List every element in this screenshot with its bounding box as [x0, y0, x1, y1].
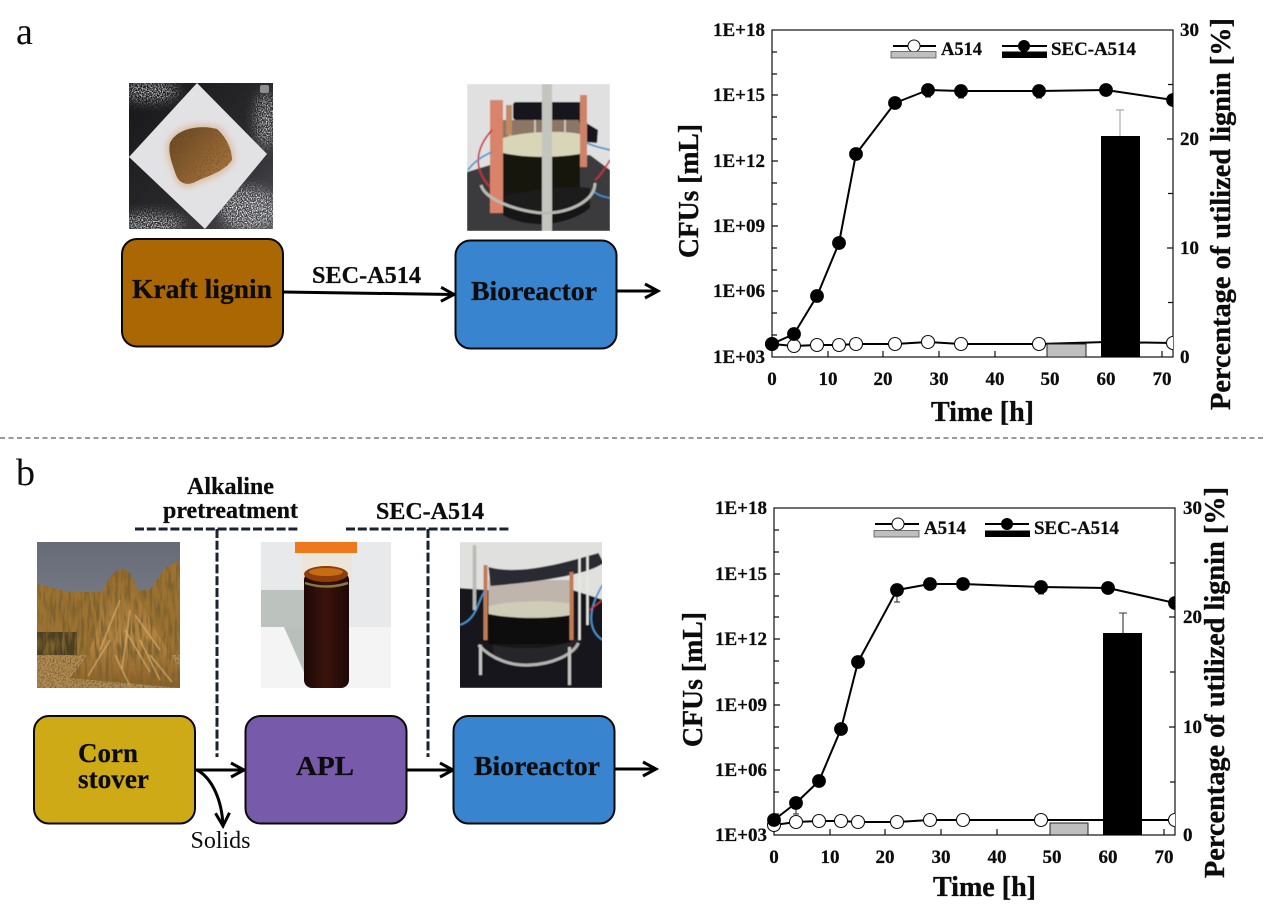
legend: A514: [924, 518, 966, 539]
dashed connector: alkaline pretreatment: [135, 529, 298, 757]
right axis tick labels: [1183, 498, 1202, 846]
chart b: CFUs and lignin utilization: [678, 487, 1231, 903]
box: Corn stover: [34, 716, 195, 824]
panel label b: b: [16, 452, 35, 494]
bar: A514 utilized lignin: [1050, 823, 1088, 835]
right axis title: Percentage of utilized lignin [%]: [1200, 487, 1231, 878]
series: SEC-A514 line and markers: [767, 577, 1182, 827]
x axis tick labels: 10: [820, 847, 840, 868]
x axis title: Time [h]: [933, 872, 1036, 903]
x axis tick labels: 0: [767, 369, 777, 390]
arrow: corn stover to APL: [195, 768, 244, 772]
label: Alkaline pretreatment: [163, 474, 298, 524]
left axis title: CFUs [mL]: [678, 612, 709, 747]
series: A514 markers: [768, 814, 1182, 832]
box: Bioreactor b: [454, 716, 614, 824]
legend: [874, 518, 1119, 539]
label: SEC-A514 strain b: SEC-A514: [376, 499, 484, 525]
box: Kraft lignin: [122, 239, 283, 346]
error bar: SEC-A514: [1119, 613, 1127, 633]
y axis tick labels: 1E+12: [713, 151, 765, 172]
y axis tick labels: [715, 498, 767, 846]
panel divider: [0, 437, 1265, 439]
legend: SEC-A514: [1051, 39, 1136, 60]
dashed connector: SEC-A514: [346, 529, 510, 757]
photo: kraft lignin powder on paper: [129, 83, 273, 229]
legend: [891, 39, 1136, 60]
right axis tick labels: 30: [1183, 498, 1202, 519]
photo: bioreactor a: [467, 84, 610, 231]
x axis tick labels: 50: [1040, 369, 1060, 390]
right axis tick labels: 20: [1183, 607, 1202, 628]
legend: A514: [941, 39, 982, 60]
box: Corn stover: Corn: [78, 737, 138, 768]
y axis tick labels: 1E+06: [715, 760, 767, 781]
y axis tick labels: 1E+03: [713, 347, 765, 368]
x axis tick labels: 10: [818, 369, 838, 390]
series: A514 line: [774, 820, 1175, 825]
y axis tick labels: 1E+18: [713, 20, 765, 41]
chart a: CFUs and lignin utilization: [674, 18, 1237, 428]
y axis tick labels: 1E+15: [715, 564, 767, 585]
photo: corn stover: [37, 542, 180, 688]
x axis tick labels: 70: [1154, 847, 1174, 868]
x axis tick labels: 0: [769, 847, 779, 868]
bar: A514 utilized lignin: [1047, 344, 1086, 357]
series: SEC-A514 line and markers: [765, 83, 1180, 351]
photo: bioreactor b: [458, 542, 604, 688]
x axis tick labels: [767, 369, 1172, 390]
x axis tick labels: 20: [874, 369, 892, 390]
x axis tick labels: 70: [1152, 369, 1172, 390]
series: A514 markers: [766, 336, 1180, 352]
label: Solids: Solids: [190, 828, 250, 854]
x axis tick labels: 40: [988, 847, 1006, 868]
x axis tick labels: 60: [1098, 847, 1118, 868]
arrow: Kraft lignin to bioreactor: [283, 292, 454, 294]
x axis tick labels: 60: [1096, 369, 1116, 390]
panel label a: a: [16, 11, 33, 53]
y axis tick labels: 1E+09: [715, 695, 767, 716]
right axis tick labels: 10: [1180, 238, 1199, 259]
label: SEC-A514 strain a: SEC-A514: [312, 263, 421, 289]
x axis title: Time [h]: [931, 397, 1034, 428]
arrow: APL to bioreactor: [407, 768, 453, 772]
right axis tick labels: 0: [1180, 347, 1190, 368]
x axis tick labels: 30: [930, 369, 948, 390]
box: Bioreactor a: [456, 240, 616, 348]
bar: SEC-A514 utilized lignin: [1103, 633, 1142, 835]
error bar: SEC-A514: [1116, 110, 1124, 136]
legend: SEC-A514: [1034, 518, 1119, 539]
right axis tick labels: 20: [1180, 129, 1199, 150]
y axis tick labels: [713, 20, 765, 368]
right axis title: Percentage of utilized lignin [%]: [1206, 18, 1237, 410]
right axis tick labels: [1180, 20, 1199, 368]
box: Bioreactor b: Bioreactor: [474, 750, 600, 781]
box: APL: APL: [296, 750, 354, 781]
box: Corn stover: stover: [78, 763, 149, 794]
y axis tick labels: 1E+12: [715, 629, 767, 650]
box: APL: [246, 716, 406, 824]
label: Alkaline pretreatment: Alkaline: [187, 474, 274, 500]
series: A514 line: [772, 342, 1173, 346]
right axis tick labels: 30: [1180, 20, 1199, 41]
box: Bioreactor a: Bioreactor: [471, 275, 597, 306]
label: Alkaline pretreatment: pretreatment: [163, 498, 298, 524]
photo: APL tube: [261, 542, 391, 688]
y axis tick labels: 1E+03: [715, 825, 767, 846]
y axis tick labels: 1E+09: [713, 216, 765, 237]
x axis tick labels: 50: [1042, 847, 1062, 868]
y axis tick labels: 1E+15: [713, 85, 765, 106]
x axis tick labels: 30: [932, 847, 950, 868]
bar: SEC-A514 utilized lignin: [1101, 136, 1140, 357]
right axis tick labels: 0: [1183, 825, 1192, 846]
left axis title: CFUs [mL]: [674, 124, 705, 258]
arrow: bioreactor b to chart: [615, 768, 656, 770]
box: Kraft lignin: Kraft lignin: [132, 273, 272, 304]
x axis tick labels: 20: [876, 847, 894, 868]
y axis tick labels: 1E+06: [713, 281, 765, 302]
arrow: solids branch: [197, 770, 223, 826]
x axis tick labels: 40: [986, 369, 1004, 390]
arrow: bioreactor a to chart: [617, 290, 658, 292]
right axis tick labels: 10: [1183, 717, 1202, 738]
y axis tick labels: 1E+18: [715, 498, 767, 519]
x axis tick labels: [769, 847, 1174, 868]
